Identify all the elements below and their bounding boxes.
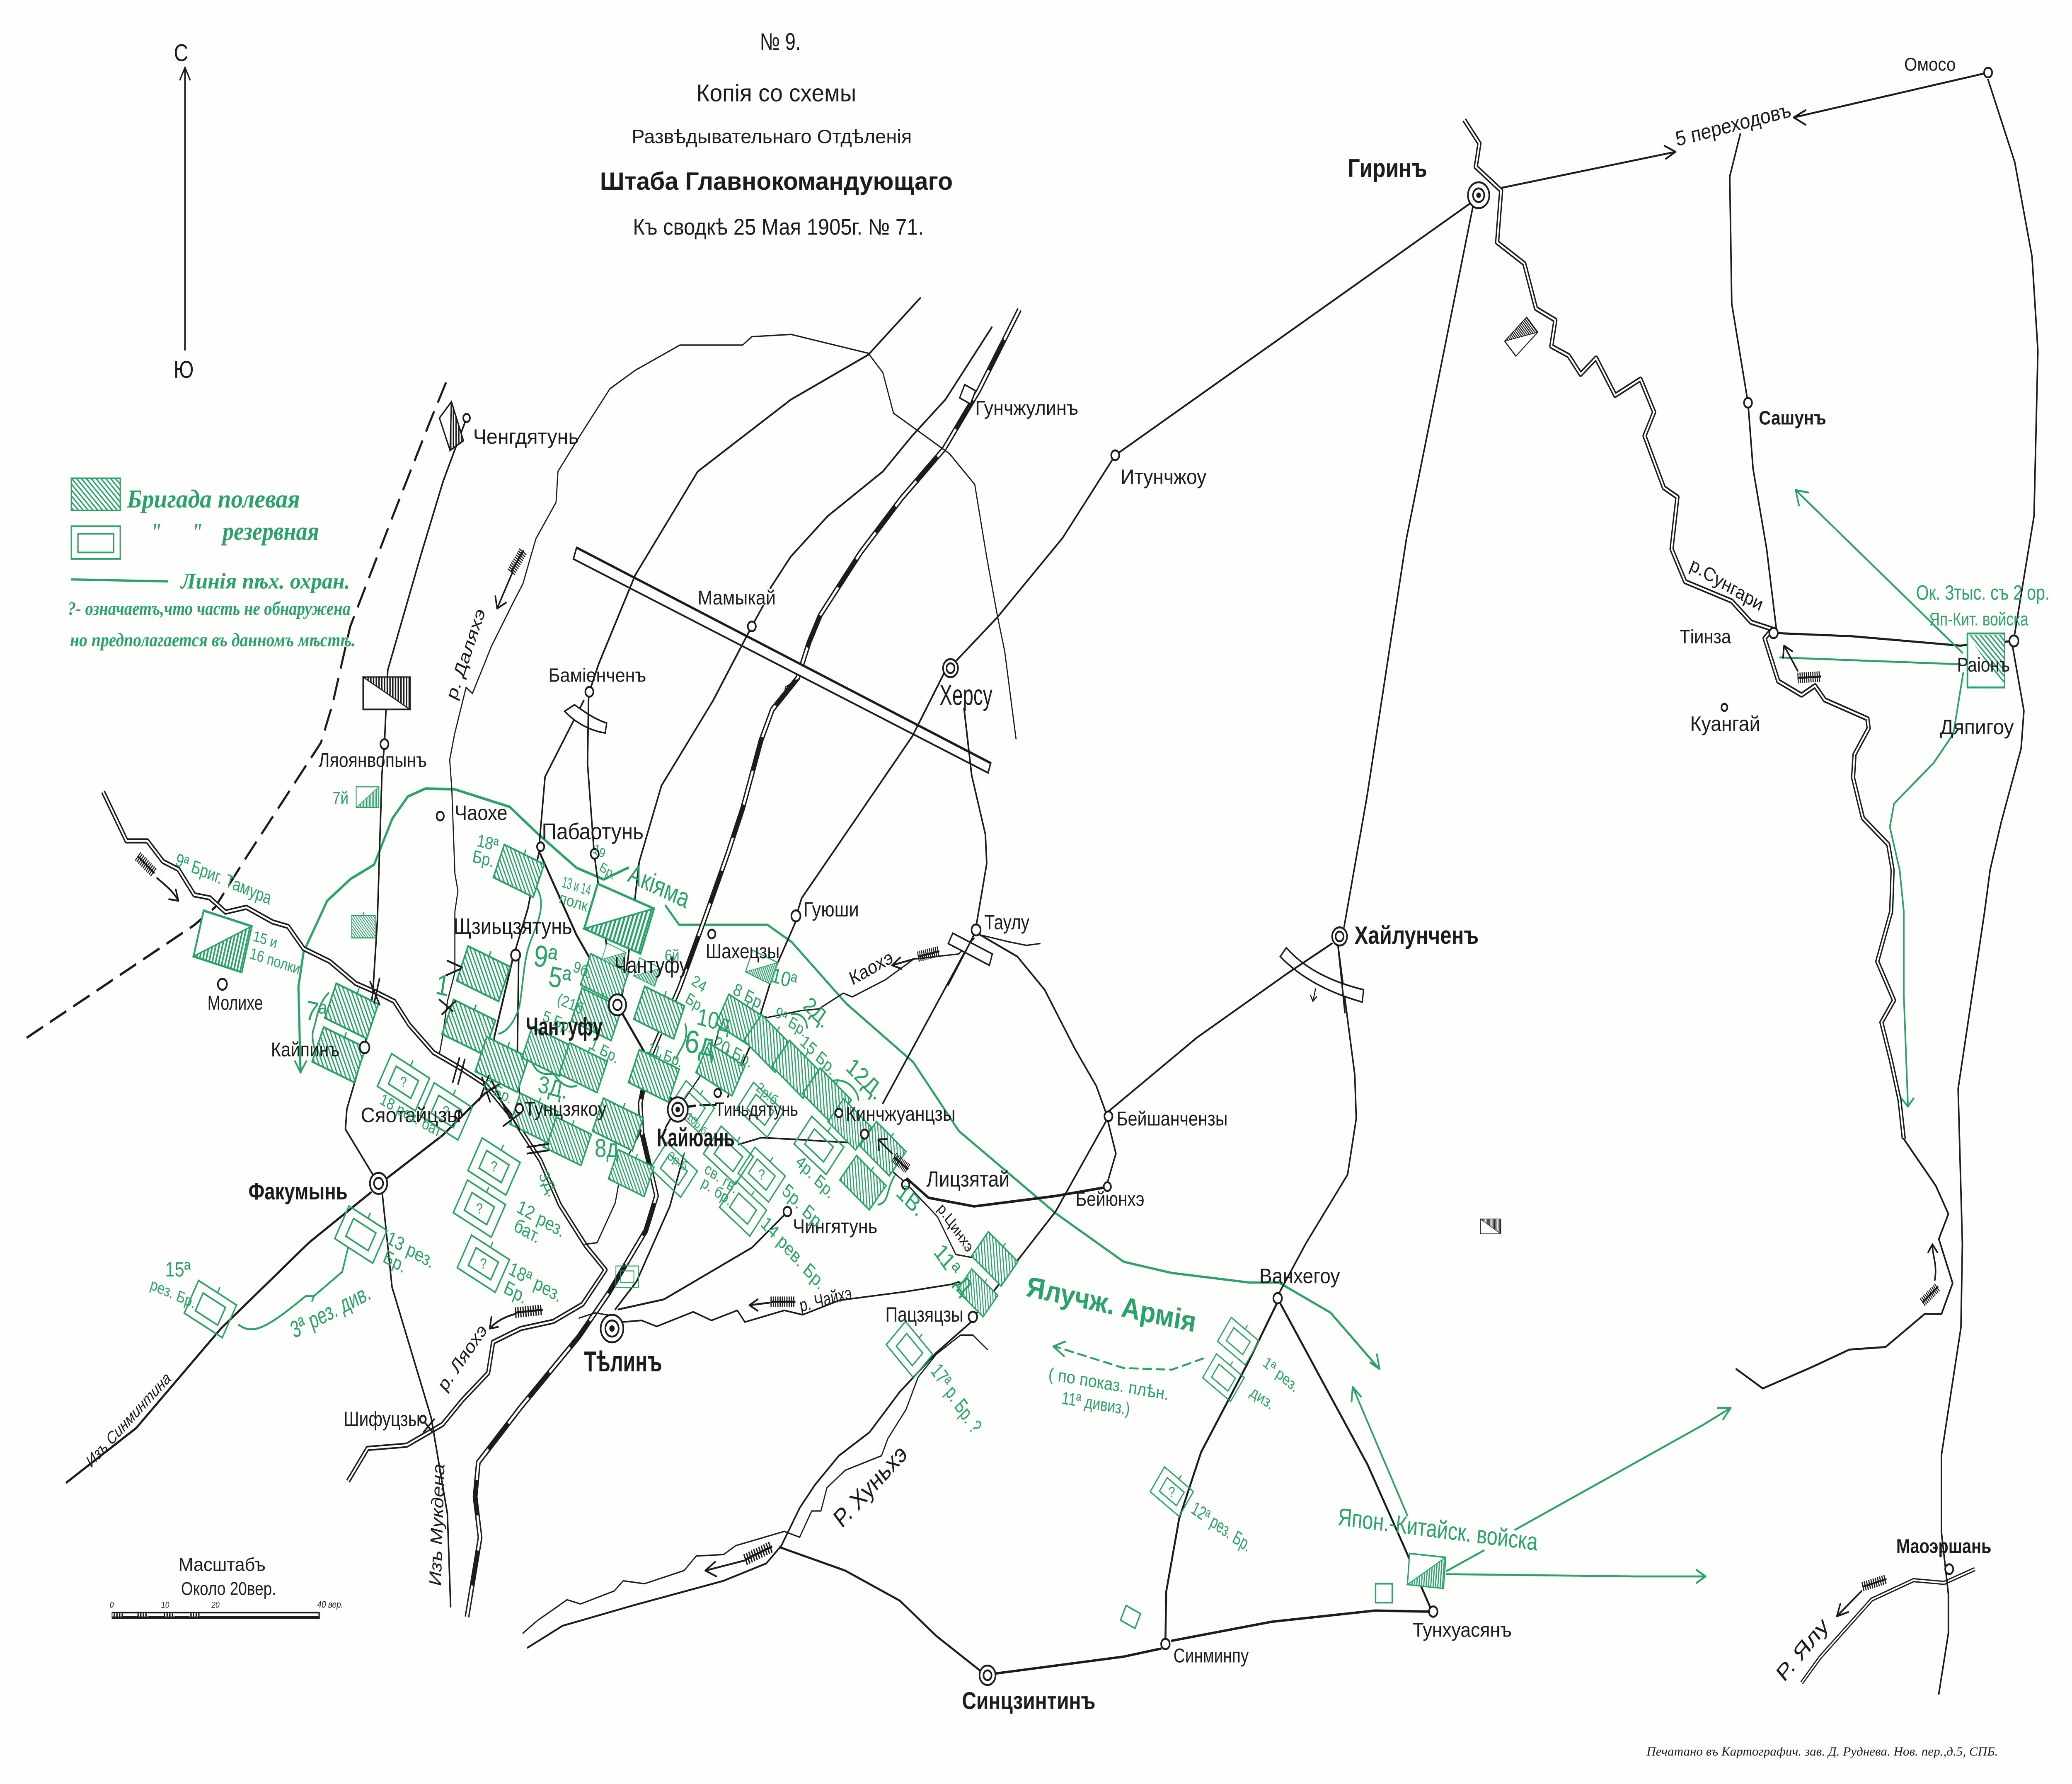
river flow feather marks: [138, 550, 1938, 1587]
place names: Щзиьцзятунь: [453, 914, 572, 939]
black enemy markers: [363, 317, 1538, 1234]
half-filled brigades: [194, 787, 1446, 1588]
green unit labels: 12ª рез. Бр.: [1188, 1497, 1254, 1557]
unknown-position marks in reserve brigades: ?: [476, 1200, 483, 1217]
legend: ": [151, 519, 162, 545]
green unit labels: полк.: [557, 889, 593, 916]
green unit labels: 6 Бр.: [481, 1076, 515, 1107]
place names: Синминпу: [1174, 1645, 1249, 1667]
place names: Кайпинъ: [271, 1039, 340, 1061]
green unit labels: 20 Бр.: [711, 1033, 756, 1072]
legend: но предполагается въ данномъ мѣстѣ.: [70, 630, 356, 651]
green unit labels: 3ª рез. див.: [287, 1279, 374, 1344]
title block: Копія со схемы: [696, 80, 856, 107]
green unit labels: рез. Бр.: [148, 1275, 198, 1312]
river and route labels: р. Даляхэ: [443, 605, 489, 703]
place names: Лицзятай: [926, 1168, 1009, 1192]
place names: Маоэршань: [1896, 1535, 1991, 1558]
green unit labels: Бр.: [471, 847, 496, 871]
legend: [68, 479, 356, 651]
place names: Молихе: [208, 992, 263, 1014]
place names: Шахецзы: [706, 939, 779, 963]
unknown-position marks in reserve brigades: ?: [480, 1255, 487, 1272]
river and route labels: [83, 98, 1832, 1686]
place names: Пацзяцзы: [885, 1303, 963, 1326]
green unit labels: 10ª: [770, 963, 799, 994]
printer note: Печатано въ Картографич. зав. Д. Руднева. Нов. пер.,д.5, СПБ.: [1646, 1745, 1998, 1759]
green unit labels: 7ª: [304, 994, 329, 1029]
river and route labels: р. Ляохэ: [434, 1320, 491, 1395]
green unit labels: 6й: [665, 946, 679, 965]
green unit labels: 5р. Бр.: [779, 1180, 828, 1235]
compass north-south arrow: [174, 40, 194, 383]
place names: Ванхегоу: [1259, 1264, 1340, 1288]
barrier lines: [564, 548, 1363, 1002]
green infantry outpost line: [295, 788, 1380, 1369]
green unit labels: 2Д.: [799, 992, 834, 1033]
place names: Гиринъ: [1348, 154, 1427, 183]
legend: резервная: [220, 517, 319, 546]
river and route labels: р.Цинхэ: [934, 1200, 977, 1256]
place names: Бейюнхэ: [1076, 1188, 1144, 1210]
green unit labels: 10р.б.: [685, 1110, 711, 1140]
green unit labels: 15ª: [165, 1257, 191, 1281]
place names: Пабаотунь: [542, 819, 644, 844]
legend: ?- означаетъ,что часть не обнаружена: [68, 598, 351, 619]
river and route labels: Изъ Синминтина: [83, 1368, 174, 1471]
green unit labels: 1 Бр.: [588, 1035, 622, 1067]
unknown-position marks in reserve brigades: ?: [1169, 1484, 1175, 1500]
place names: Чантуфу: [615, 952, 688, 978]
river and route labels: р.Сунгари: [1687, 554, 1766, 616]
reserve brigades: [184, 1048, 1392, 1628]
green unit labels: 8д: [595, 1134, 619, 1163]
large city markers: [370, 182, 1489, 1685]
green unit labels: [148, 581, 2050, 1557]
green unit labels: 9ª: [532, 938, 560, 977]
river and route labels: р. Чайхэ: [798, 1282, 853, 1316]
river Sungari (double line): [1464, 120, 1904, 1139]
green unit labels: 19: [591, 841, 608, 861]
green unit labels: 11 Бр.: [645, 1039, 685, 1071]
green unit labels: 9ª Бр.: [772, 1003, 810, 1041]
green unit labels: (21б: [555, 990, 586, 1018]
place names: Куангай: [1690, 712, 1760, 735]
green unit labels: 5 Бр.: [541, 1007, 575, 1037]
river and route labels: Изъ Мукдена: [425, 1463, 448, 1586]
dashed boundary line: [25, 382, 446, 1039]
green unit labels: 9б.: [571, 957, 594, 982]
scale bar: [110, 1554, 343, 1618]
unknown-position marks in reserve brigades: ?: [400, 1074, 407, 1090]
green unit labels: 2р.б.: [754, 1079, 783, 1111]
green unit labels: 18 рез. бат.: [378, 1090, 446, 1142]
unknown-position marks in reserve brigades: ?: [758, 1166, 765, 1183]
place names: Чаохе: [455, 801, 507, 824]
title block: [600, 29, 953, 240]
green unit labels: 12Д.: [842, 1053, 887, 1105]
green unit labels: бат.: [511, 1214, 543, 1248]
green movement arrows: [1053, 490, 1963, 1583]
green unit labels: 7й: [332, 788, 349, 808]
river and route labels: 5 переходовъ: [1674, 98, 1793, 151]
green unit labels: 8 Бр.: [731, 980, 768, 1015]
river-road crossings: [370, 961, 549, 1432]
place names: Тунхуасянъ: [1413, 1619, 1512, 1641]
scale bar: Масштабъ: [178, 1554, 266, 1575]
green unit labels: 3Д.: [535, 1168, 560, 1201]
place names: Кинчжуанцзы: [846, 1103, 955, 1125]
place names: Гунчжулинъ: [975, 397, 1078, 419]
place names: Синцзинтинъ: [962, 1688, 1095, 1714]
scale bar: 0: [110, 1600, 114, 1610]
place names: Раіонъ: [1957, 654, 2010, 676]
green unit labels: 13 и 14: [561, 873, 593, 899]
place names: Баміенченъ: [548, 665, 646, 686]
green bracket curves: [239, 888, 895, 1330]
green unit labels: ( по показ. плѣн.: [1048, 1364, 1170, 1404]
place names: Итунчжоу: [1121, 465, 1206, 488]
place names: Ченгдятунь: [473, 425, 579, 448]
green unit labels: Бр.: [597, 860, 618, 883]
green unit labels: 3р.б: [666, 1148, 690, 1174]
scale bar: 40 вер.: [317, 1599, 343, 1610]
place names: Кайюань: [657, 1124, 735, 1152]
green unit labels: 6д: [683, 1023, 717, 1064]
river and route labels: Каохэ: [846, 946, 896, 990]
green unit labels: 17ª р. Бр. ?: [927, 1359, 986, 1438]
railway: [467, 309, 1019, 1617]
place names: Таулу: [985, 910, 1029, 934]
compass north-south arrow: Ю: [174, 357, 194, 383]
green unit labels: Ялучж. Армія: [1024, 1270, 1198, 1338]
place names: Херсу: [939, 679, 992, 711]
green unit labels: 10д: [695, 1003, 732, 1038]
green unit labels: 1: [434, 968, 452, 1003]
green unit labels: Бр.: [501, 1276, 530, 1308]
place names: Тиньдятунь: [715, 1099, 798, 1120]
green unit labels: Яп-Кит. войска: [1929, 609, 2028, 629]
thin rivers: [440, 334, 1953, 1633]
unknown-position marks in reserve brigades: [400, 1074, 1175, 1500]
place names: Сяотайцзы: [361, 1103, 461, 1127]
place names: Мамыкай: [698, 587, 776, 609]
place names: Факумынь: [248, 1178, 348, 1204]
green unit labels: Бр.: [683, 989, 707, 1017]
place names: Чингятунь: [793, 1216, 877, 1238]
place names: Тѣлинъ: [584, 1345, 662, 1378]
river Yalu (double line): [1802, 1569, 1975, 1683]
river Liao (double line): [103, 792, 605, 1481]
place names: Чантуфу: [526, 1013, 603, 1041]
title block: Къ сводкѣ 25 Мая 1905г. № 71.: [633, 214, 924, 240]
Raion half-filled unit: [1968, 633, 2004, 687]
green unit labels: 16 полки: [248, 944, 302, 978]
green unit labels: 24: [689, 972, 709, 996]
legend: Бригада полевая: [126, 485, 300, 513]
legend: Линія пѣх. охран.: [180, 568, 350, 593]
green unit labels: 18ª рез.: [506, 1258, 565, 1307]
title block: Штаба Главнокомандующаго: [600, 167, 953, 195]
compass north-south arrow: С: [174, 40, 188, 67]
unknown-position marks in reserve brigades: ?: [443, 1103, 450, 1119]
green unit labels: 11ª дивиз.): [1060, 1388, 1131, 1419]
green unit labels: 9ª Бриг. Тамура: [173, 849, 274, 909]
field brigades: [312, 840, 1020, 1317]
green unit labels: Ок. 3тыс. съ 2 ор.: [1916, 581, 2050, 604]
river flow arrows: [157, 110, 1937, 1616]
green unit labels: 11ª Д.: [929, 1239, 980, 1305]
scale bar: 20: [211, 1600, 220, 1610]
town markers: [218, 68, 2019, 1649]
place names: Ляоянвопынъ: [318, 749, 427, 771]
re-draw roads over barrier bars: [588, 575, 1345, 1013]
green unit labels: 15 и: [252, 928, 279, 952]
green unit labels: 15 Бр.: [797, 1032, 840, 1079]
green unit labels: 14 рев. Бр.: [758, 1212, 829, 1294]
scale bar: 10: [161, 1600, 169, 1610]
river and route labels: Р. Ялу: [1772, 1613, 1832, 1686]
green unit labels: 1В.: [892, 1178, 929, 1222]
unknown-position marks in reserve brigades: ?: [491, 1158, 497, 1175]
title block: № 9.: [760, 29, 801, 55]
green unit labels: 1ª рез.: [1260, 1353, 1302, 1396]
green unit labels: Акіяма: [625, 858, 693, 914]
green unit labels: Япон.-Китайск. войска: [1337, 1502, 1539, 1556]
place names: Дяпигоу: [1940, 715, 2014, 739]
green unit labels: 13 рез.: [384, 1227, 438, 1273]
place names: Тіинза: [1680, 626, 1731, 648]
green unit labels: р. бр.: [699, 1173, 735, 1209]
green unit labels: Бр.: [380, 1246, 409, 1278]
legend: ": [191, 519, 203, 545]
place names: Хайлунченъ: [1354, 921, 1479, 949]
green unit labels: 12 рез.: [514, 1196, 568, 1242]
scale bar: Около 20вер.: [181, 1578, 276, 1599]
green unit labels: св. гв.: [702, 1160, 741, 1197]
place names: Гуюши: [804, 897, 859, 921]
green unit labels: 3Д.: [536, 1071, 570, 1105]
green unit labels: диз.: [1248, 1383, 1277, 1413]
green unit labels: 4р. Бр.: [793, 1152, 838, 1203]
place names: Бейшанчензы: [1117, 1108, 1227, 1130]
place names: Сашунъ: [1759, 407, 1826, 429]
green unit labels: 5ª: [547, 960, 573, 996]
river and route labels: Р. Хуньхэ: [829, 1439, 912, 1533]
green unit labels: 18ª: [476, 831, 500, 856]
place names: Тунцзякоу: [525, 1098, 607, 1120]
title block: Развѣдывательнаго Отдѣленія: [632, 126, 912, 147]
place names: Омосо: [1904, 54, 1956, 75]
place names: Шифуцзы: [344, 1407, 420, 1431]
